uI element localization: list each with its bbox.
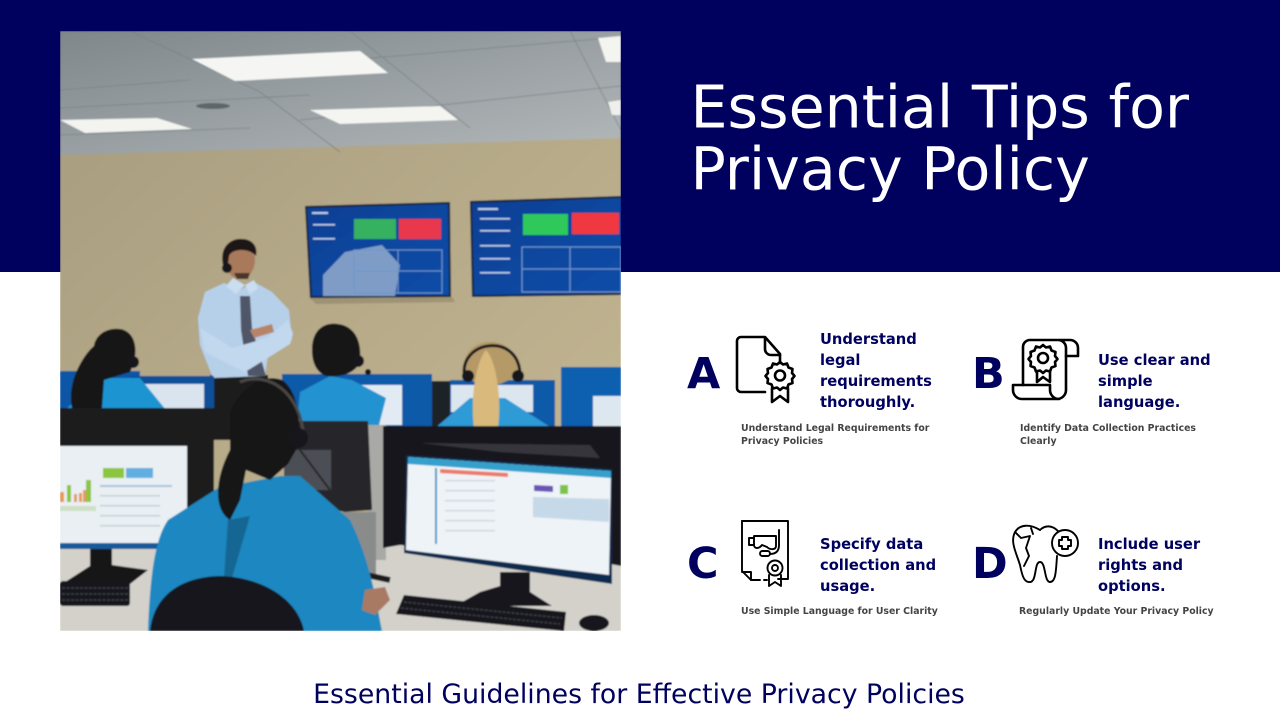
caption A (741, 423, 930, 447)
front woman with headset (148, 378, 390, 631)
back row blonde woman (434, 342, 555, 430)
caption C: Use Simple Language for User Clarity (741, 606, 938, 617)
icon: tooth with plus badge (1013, 526, 1078, 582)
heading B: Use clear and (1098, 352, 1211, 369)
front left monitor (60, 408, 214, 606)
heading A: legal (820, 352, 860, 369)
item D (972, 526, 1214, 617)
heading A: Understand (820, 331, 917, 348)
heading B (1098, 352, 1211, 411)
heading A: requirements (820, 373, 932, 390)
title (690, 74, 1190, 204)
caption B: Identify Data Collection Practices (1020, 423, 1196, 434)
item C (687, 521, 938, 617)
standing man (198, 239, 293, 440)
caption A: Privacy Policies (741, 436, 824, 447)
back row monitors (60, 371, 140, 411)
desk (60, 544, 621, 631)
heading B: simple (1098, 373, 1153, 390)
heading C: usage. (820, 578, 875, 595)
heading C: collection and (820, 557, 936, 574)
header band (0, 0, 1280, 272)
title: Essential Tips for (690, 74, 1190, 142)
icon: scroll with award badge (1013, 340, 1078, 399)
heading D (1098, 536, 1201, 595)
letter B: B (972, 349, 1005, 399)
caption B (1020, 423, 1196, 447)
middle dark monitor (284, 421, 376, 574)
photo: call centre training room (60, 31, 621, 631)
heading C: Specify data (820, 536, 923, 553)
item B (972, 340, 1211, 447)
letter D: D (972, 539, 1008, 589)
back row centre man (298, 322, 387, 426)
caption B: Clearly (1020, 436, 1057, 447)
letter A: A (687, 349, 721, 399)
icon: document with award badge (737, 337, 794, 402)
title: Privacy Policy (690, 136, 1090, 204)
heading D: rights and (1098, 557, 1183, 574)
heading A: thoroughly. (820, 394, 915, 411)
heading B: language. (1098, 394, 1180, 411)
heading C (820, 536, 936, 595)
icon: certificate with diving mask (742, 521, 788, 586)
heading A (820, 331, 932, 411)
back row left woman (65, 329, 166, 410)
heading D: Include user (1098, 536, 1201, 553)
caption D: Regularly Update Your Privacy Policy (1019, 606, 1214, 617)
heading D: options. (1098, 578, 1166, 595)
caption A: Understand Legal Requirements for (741, 423, 930, 434)
letter C: C (687, 539, 719, 589)
item A (687, 331, 932, 447)
front right monitor (362, 426, 621, 631)
footer caption: Essential Guidelines for Effective Privacy Policies (313, 679, 965, 710)
